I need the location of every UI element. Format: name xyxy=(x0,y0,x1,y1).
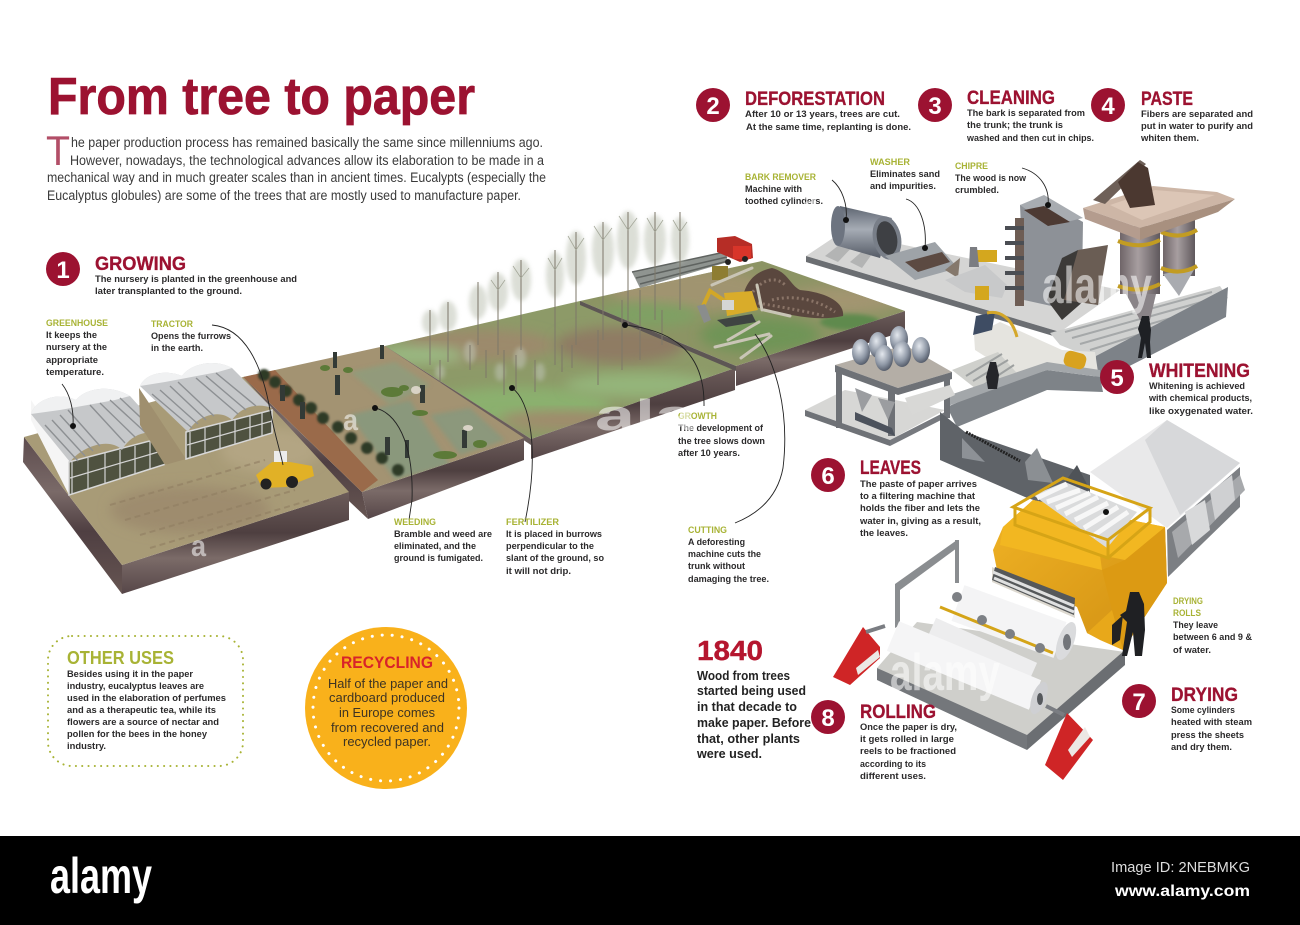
panel: recycling: in Europe comes xyxy=(339,705,435,720)
truck and trailer xyxy=(632,236,753,288)
watermarks xyxy=(191,185,1152,702)
step 1: growing: later transplanted to the ground. xyxy=(95,286,242,297)
step 5: whitening: WHITENING xyxy=(1149,361,1250,382)
label: washer xyxy=(870,157,940,192)
label: drying rolls xyxy=(1173,596,1252,656)
footer bar: www.alamy.com xyxy=(1114,883,1250,900)
red motor left xyxy=(833,626,885,685)
step 7: drying: press the sheets xyxy=(1171,730,1244,741)
label: growth: The development of xyxy=(678,423,764,434)
step 8: rolling: ROLLING xyxy=(860,702,936,723)
step 5: whitening xyxy=(1100,360,1253,417)
panel: recycling: Half of the paper and xyxy=(328,676,448,691)
panel: other uses: and as a therapeutic tea, while its xyxy=(67,705,216,716)
label: weeding: ground is fumigated. xyxy=(394,553,483,564)
footer bar: alamy xyxy=(50,848,152,904)
step 7: drying xyxy=(1122,684,1252,753)
step 5: whitening: 5 xyxy=(1110,365,1124,392)
label: drying rolls: They leave xyxy=(1173,620,1218,631)
land block 4: cutting xyxy=(580,261,905,386)
label: tractor: in the earth. xyxy=(151,343,203,354)
wood chip pile xyxy=(742,268,843,318)
land block 3: tree growth xyxy=(375,301,736,459)
callout: 1840 xyxy=(696,635,811,761)
label: fertilizer: it will not drip. xyxy=(506,566,571,577)
panel: recycling: RECYCLING xyxy=(341,653,433,672)
callout: 1840: make paper. Before xyxy=(697,716,811,730)
label: chipre xyxy=(955,161,1027,196)
step 5: whitening: with chemical products, xyxy=(1148,393,1252,404)
label: greenhouse: It keeps the xyxy=(46,330,97,341)
yellow tractor xyxy=(256,451,314,490)
drum: bark remover xyxy=(825,206,905,268)
label: greenhouse: nursery at the xyxy=(46,342,107,353)
intro text block: mechanical way and in much greater scales than in ancient times. Eucalypts (especially the xyxy=(47,170,546,185)
panel: other uses: used in the elaboration of perfumes xyxy=(67,693,226,704)
intro text block: T xyxy=(46,127,70,174)
step 6: leaves: to a filtering machine that xyxy=(860,491,976,502)
panel: other uses: pollen for the bees in the honey xyxy=(67,729,208,740)
red motor right xyxy=(1045,706,1093,780)
callout: 1840: in that decade to xyxy=(697,700,797,714)
land block 2: weeding xyxy=(240,345,524,519)
step 6: leaves: LEAVES xyxy=(860,458,921,479)
label: drying rolls: of water. xyxy=(1173,645,1211,656)
label: cutting: trunk without xyxy=(688,561,746,572)
step 4: paste: put in water to purify and xyxy=(1141,121,1253,132)
whitening section xyxy=(947,312,1103,427)
label: growth: GROWTH xyxy=(678,411,717,422)
intro text block: Eucalyptus globules) are some of the trees that are mostly used to manufacture paper. xyxy=(47,188,521,203)
label: growth: the tree slows down xyxy=(678,436,765,447)
cut logs xyxy=(712,268,790,358)
label: chipre: crumbled. xyxy=(955,185,999,196)
step 2: deforestation: 2 xyxy=(706,93,720,120)
chipper xyxy=(945,247,1007,300)
step 7: drying: and dry them. xyxy=(1171,742,1232,753)
panel: other uses: industry. xyxy=(67,741,106,752)
label: fertilizer: It is placed in burrows xyxy=(506,529,602,540)
label: bark remover: BARK REMOVER xyxy=(745,172,816,183)
label: bark remover xyxy=(745,172,823,207)
step 4: paste: whiten them. xyxy=(1140,133,1199,144)
step 5: whitening: like oxygenated water. xyxy=(1149,406,1253,417)
label: bark remover: toothed cylinders. xyxy=(745,196,823,207)
chip hopper and conveyor xyxy=(1005,195,1085,320)
label: chipre: The wood is now xyxy=(955,173,1027,184)
label: weeding: eliminated, and the xyxy=(394,541,476,552)
label: tractor: TRACTOR xyxy=(151,319,193,330)
label: drying rolls: ROLLS xyxy=(1173,608,1201,619)
step 3: cleaning: CLEANING xyxy=(967,88,1055,109)
step 3: cleaning: washed and then cut in chips. xyxy=(966,133,1094,144)
label: tractor: Opens the furrows xyxy=(151,331,231,342)
intro text block xyxy=(46,127,546,203)
label: growth: after 10 years. xyxy=(678,448,740,459)
label: greenhouse: GREENHOUSE xyxy=(46,318,108,329)
intro text block: he paper production process has remained basically the same since millenniums ago. xyxy=(71,135,543,150)
step 3: cleaning: The bark is separated from xyxy=(967,108,1085,119)
label: cutting xyxy=(688,525,769,585)
step 3: cleaning xyxy=(918,88,1094,144)
label: growth xyxy=(678,411,765,459)
label: greenhouse: temperature. xyxy=(46,367,104,378)
label: fertilizer: FERTILIZER xyxy=(506,517,559,528)
label: washer: Eliminates sand xyxy=(870,169,940,180)
label: bark remover: Machine with xyxy=(745,184,802,195)
watermarks: alamy xyxy=(1042,257,1152,315)
label: cutting: A deforesting xyxy=(688,537,745,548)
label: weeding xyxy=(394,517,492,564)
label: drying rolls: DRYING xyxy=(1173,596,1203,607)
step 2: deforestation xyxy=(696,88,911,133)
step 1: growing: 1 xyxy=(56,257,70,284)
step 8: rolling: reels to be fractioned xyxy=(860,746,956,757)
washer xyxy=(885,242,960,280)
leader lines xyxy=(62,168,1109,523)
step 2: deforestation: At the same time, replanting is done. xyxy=(746,122,911,133)
step 8: rolling: Once the paper is dry, xyxy=(860,722,957,733)
filtering machine base and roof xyxy=(940,412,1245,577)
step 8: rolling: 8 xyxy=(821,705,835,732)
callout: 1840: started being used xyxy=(697,684,806,698)
step 5: whitening: Whitening is achieved xyxy=(1149,381,1245,392)
silos and pulp hopper xyxy=(1050,160,1235,384)
step 6: leaves: The paste of paper arrives xyxy=(860,479,977,490)
rolling section frame and rolls xyxy=(877,540,1125,750)
step 4: paste: Fibers are separated and xyxy=(1141,109,1253,120)
label: washer: and impurities. xyxy=(870,181,936,192)
label: washer: WASHER xyxy=(870,157,910,168)
label: cutting: machine cuts the xyxy=(688,549,761,560)
step 6: leaves xyxy=(811,458,981,539)
label: drying rolls: between 6 and 9 & xyxy=(1173,632,1252,643)
panel: recycling: recycled paper. xyxy=(343,734,431,749)
watermarks: alamy xyxy=(890,644,1000,702)
step 4: paste xyxy=(1091,88,1253,144)
step 6: leaves: the leaves. xyxy=(860,528,908,539)
operator figure xyxy=(1120,592,1145,656)
drying machine yellow housing xyxy=(992,478,1167,650)
watermarks: a xyxy=(343,404,358,437)
step 1: growing: The nursery is planted in the greenhouse and xyxy=(95,274,297,285)
label: weeding: Bramble and weed are xyxy=(394,529,492,540)
watermarks: ala xyxy=(595,391,696,440)
step 6: leaves: water in, giving as a result, xyxy=(859,516,981,527)
step 8: rolling xyxy=(811,700,957,782)
label: greenhouse xyxy=(46,318,108,378)
step 8: rolling: different uses. xyxy=(860,771,926,782)
callout: 1840: were used. xyxy=(696,747,762,761)
label: chipre: CHIPRE xyxy=(955,161,988,172)
label: greenhouse: appropriate xyxy=(46,355,98,366)
greenhouses xyxy=(31,363,272,495)
label: cutting: damaging the tree. xyxy=(688,574,769,585)
title: From tree to paper xyxy=(48,68,475,126)
callout: 1840: 1840 xyxy=(697,635,763,666)
callout: 1840: that, other plants xyxy=(697,732,800,746)
step 4: paste: PASTE xyxy=(1141,89,1193,110)
watermarks: a xyxy=(191,530,206,563)
bleaching tower platform xyxy=(805,326,955,446)
trees xyxy=(422,211,689,395)
greenhouse 1 xyxy=(31,389,166,495)
panel: recycling xyxy=(305,627,467,789)
label: fertilizer xyxy=(506,517,604,577)
watermarks: a xyxy=(803,185,817,216)
label: fertilizer: perpendicular to the xyxy=(506,541,594,552)
step 7: drying: 7 xyxy=(1132,689,1146,716)
label: fertilizer: slant of the ground, so xyxy=(506,553,604,564)
step 3: cleaning: 3 xyxy=(928,93,942,120)
step 1: growing xyxy=(46,252,297,297)
step 7: drying: heated with steam xyxy=(1171,717,1252,728)
step 7: drying: Some cylinders xyxy=(1171,705,1235,716)
bark remover and washer line xyxy=(806,195,1120,338)
person on pulp line xyxy=(1138,316,1151,358)
excavator xyxy=(697,291,758,327)
panel: other uses: OTHER USES xyxy=(67,648,174,668)
label: tractor xyxy=(151,319,231,354)
step 2: deforestation: After 10 or 13 years, trees are cut. xyxy=(745,109,900,120)
label: weeding: WEEDING xyxy=(394,517,436,528)
panel: recycling: from recovered and xyxy=(331,720,444,735)
step 1: growing: GROWING xyxy=(95,254,186,275)
step 4: paste: 4 xyxy=(1101,93,1115,120)
step 2: deforestation: DEFORESTATION xyxy=(745,89,885,110)
step 8: rolling: according to its xyxy=(860,759,926,770)
panel: other uses: Besides using it in the paper xyxy=(67,669,193,680)
step 7: drying: DRYING xyxy=(1171,685,1238,706)
panel: other uses: flowers are a source of nectar and xyxy=(67,717,219,728)
panel: other uses xyxy=(48,636,243,766)
panel: recycling: cardboard produced xyxy=(329,690,445,705)
intro text block: However, nowadays, the technological advances allow its elaboration to be made in a xyxy=(70,153,544,168)
greenhouse 2 xyxy=(139,363,272,465)
panel: other uses: industry, eucalyptus leaves are xyxy=(67,681,204,692)
land block 1: greenhouse field xyxy=(23,377,349,594)
footer bar: Image ID: 2NEBMKG xyxy=(1111,859,1250,876)
footer bar xyxy=(0,836,1300,925)
label: cutting: CUTTING xyxy=(688,525,727,536)
step 6: leaves: holds the fiber and lets the xyxy=(860,503,980,514)
step 3: cleaning: the trunk; the trunk is xyxy=(967,120,1063,131)
step 8: rolling: it gets rolled in large xyxy=(860,734,954,745)
step 6: leaves: 6 xyxy=(821,463,835,490)
callout: 1840: Wood from trees xyxy=(697,669,790,683)
